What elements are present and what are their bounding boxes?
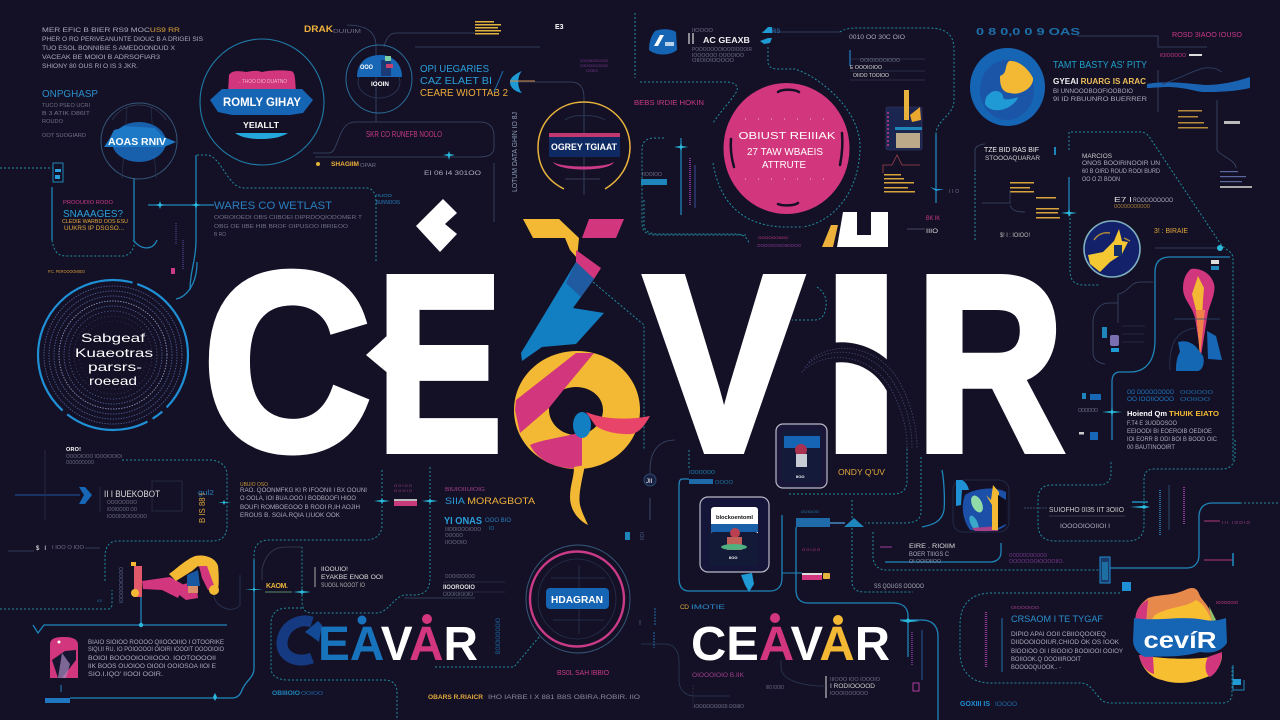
main title: CÉVIR: C [203,221,371,503]
circle badge: small blue book: IOOIN [371,81,389,88]
text block: SIA MORAGBOTA: OOO BIO [485,518,511,524]
mini bars: top orange text [475,21,501,34]
label: SHAGIIM: EI 06 I4 301OO [424,170,481,177]
side tag and SNAAAGES text block: UUKRS IP DSGSO... [64,226,124,232]
label: E3 and side notes [555,24,608,73]
text block: WARES CO WETLAST: BUNNOOIS [376,200,400,206]
footer label strip: BS0L SAH IBBIO [557,670,610,677]
circle badge: ROMLY GIHAY: YEIALLT [243,120,280,130]
text block: GARE RURAL [880,543,1064,565]
label: DRAK [304,24,361,35]
text block: left side label: OOT SUOGIARD [42,133,86,139]
triangle node and tag: OOIOOO [801,509,819,514]
label and lines near blob panel: IOOOOIOOIIOI I [1060,523,1110,530]
badge: cevíR [1133,588,1238,683]
circle badge: ROMLY GIHAY: .. THOO DIO DUATNO [238,79,288,85]
logo: blue shield with text [649,27,780,64]
text block: GARE RURAL: BOER TIIIGS C [909,551,949,558]
label: SI ONIO [757,216,1188,248]
logo: blue shield with text: POOOOOOOIOOOIOOOIR [692,47,752,53]
arrow and text block bottom-left: IOOIOOOO OO [107,507,137,513]
small orange text stack and graph [883,155,959,195]
arrow and text block bottom-left: II I BUEKOBOT [104,489,160,499]
label: SI ONIO: IIIO [926,229,938,235]
text block: CRSAOM: DIIDOOIOOIUR,CHIOD OK OS IOOK [1011,639,1120,646]
small orange text stack and graph: IIO [949,189,959,195]
text block: TAMT BASTY [1053,60,1147,103]
phone 2: IIOO [729,555,737,560]
badge: cevíR: cevíR [1144,627,1217,653]
mini pink bar node [394,483,417,506]
text block: CRSAOM: IOOOO [995,702,1017,708]
large dotted circle: parsrs- [88,360,142,374]
text block: GARE RURAL: OI OOIOIIOO [909,559,941,565]
text block: OPI UEGARIES: CAZ ELAET BI [420,76,492,87]
pink arch icon with paragraph: IIK BOOS OUOIOO OIOOI OOIOSOA IIOI E [88,663,217,670]
labels around right wordmark [640,498,922,710]
label: KAOM node: SUOGL NOOOT IO [321,583,365,589]
label: SI ONIO: 3! : BIRAIE [1154,228,1188,235]
text block: TAMT BASTY: TAMT BASTY AS' PITY [1053,60,1147,71]
wordmark: CEAVAR left: EAVAR [318,618,478,671]
circle badge: small blue book [346,45,412,113]
pink circle callout: ATTRUTE [762,159,806,171]
text block: WARES CO WETLAST: OBG OE IIBE HIB BROF OIPUSOO IBRIEOO [214,224,348,230]
footer label strip [272,670,640,701]
text block: left side label: ONPGHASP [42,89,98,100]
large dotted circle: Sabgeaf [81,331,146,345]
arrow and text block bottom-left: IOOOIOIOOOOOO [107,514,147,520]
label and lines near blob panel: SUIOFHO 0I35 IIT 3OIIO [1049,507,1125,514]
logo: blue shield with text: AC GEAXB [703,35,750,45]
side tag and SNAAAGES text block: SNAAAGES? [63,209,123,220]
small side texts top right [1178,110,1252,188]
text block: CRSAOM: BOIIOOK.Q OOOIIIROOIT [1011,656,1081,663]
vertical label near arrow: gul2 [198,490,214,497]
label: SHAGIIM: OPAR [360,163,376,169]
side tag and SNAAAGES text block: PROOUDIO RODO [63,200,113,206]
label: ONDY: ONDY Q'UV [838,468,886,477]
arrow and text block bottom-left: OOOOOOOO [107,500,137,506]
side bars in dashed panel [641,158,695,208]
label: KAOM node [262,547,383,592]
label small: IIOOROOIO [443,584,475,591]
text block: right Hoiend: OO IOOIIOOOO [1127,396,1174,403]
dotted swoosh across I [802,348,917,448]
phone 1: IIOO [796,474,804,479]
text block: OPI UEGARIES: OPI UEGARIES [420,64,489,75]
arrow and text block bottom-left: OOOOOOOOO [66,460,94,466]
pink circle callout: OBIUST REIIIAK [738,130,836,142]
label: small left tags: $I [36,546,46,552]
labels around right wordmark: IOOOIOOOOOO [830,691,868,697]
arrow and text block bottom-left: ORO! [66,447,81,453]
label: SI ONIO: OOOOOOOOIIOOOO [757,243,801,248]
text block: left side label: TUCO PSEO UCRI [42,103,90,109]
text block: WARES CO WETLAST [176,193,400,245]
text block: CRSAOM [960,605,1124,708]
table of labels: 0010 OO 30C OIO [849,34,905,41]
footer label strip: OBARS R.RIAICR [428,694,483,701]
text block: centre-bottom paragraph: BOUFI ROMBOEGOO B ROOI R,IH AOJIH [240,504,360,511]
heading: blue digits top right: 0 8 0,0 0 9 OAS [976,26,1080,38]
labels around right wordmark: IIOI [640,532,646,540]
triangle node and tag: OOIOO [802,547,820,552]
text block: CRSAOM: BOOOOQUOOK.. - [1011,664,1061,671]
text block: SIA MORAGBOTA: IIIOOIOOOIOOO [445,527,481,533]
colourful Z glyph [521,219,624,361]
text block: MARCIOS: OOOOOOOOOOO [1114,204,1150,210]
text block: CRSAOM: DIPIO APAI OOII CBIIOQOOIEQ [1011,631,1106,638]
text block: right Hoiend: Hoiend Qm [1127,411,1167,418]
footer label strip: IHO IARBE I X 881 B8S OBIRA.ROBIR. IIO [488,694,640,701]
text block: centre-bottom paragraph: UBUIO OSO [240,482,268,488]
pink arch icon with paragraph [45,637,225,703]
text block: SIA MORAGBOTA: IIOOOIO [445,540,467,546]
arrow and text block bottom-left [15,447,182,520]
label: KAOM node: KAOM. [266,583,288,590]
heading: blue digits top right: IOIOOOOO [1160,53,1186,59]
label: SI ONIO: $! I : IOIOO! [1000,233,1030,239]
side tag and SNAAAGES text block: P.C. PEROOOOMIEO [48,269,85,274]
label: E3 and side notes: OOOOIIIOOOOOOIO [580,58,608,63]
text block: GARE RURAL: EIRE . RIOIIM [909,543,955,550]
side bars in dashed panel: IIOOIOO [642,172,662,178]
large dotted circle: Kuaeotras [75,346,153,360]
text block: top-left intro: TUO ESOL BONNIBIE S AMEDOONDUD X [42,45,176,52]
text block: right Hoiend: 00 BAUTINOOIRT [1127,444,1175,451]
heading: blue digits top right: ROSD 3IAOO IOUSO [1172,32,1243,39]
label: E3 and side notes: OOIO [586,68,598,73]
accent over I [822,212,888,247]
footer label strip: OBIIIOIO [272,690,300,697]
main title: CÉVIR: I [821,225,902,504]
circle badge: OGREY TGIAAT: OGREY TGIAAT [551,142,617,153]
text block: OPI UEGARIES [420,64,508,99]
text block: TAMT BASTY: GYEAI RUARG IS ARAC [1053,77,1146,86]
text block: MARCIOS: E7 I [1114,197,1132,204]
text block: centre-bottom paragraph [240,482,367,519]
label: pink EBS IRDIE HOKIN: BEBS IRDIE HOKIN [634,98,704,107]
labels around right wordmark: IMOTIE [691,604,726,611]
logo: blue shield with text: OIIOIOIOOOOO [692,58,734,64]
logo: blue shield with text: RS [772,29,780,35]
label and lines near blob panel [1024,485,1250,566]
blue tag on connector [1100,557,1131,591]
text block: MARCIOS: ONOS BOOIRINOOIR UN [1082,160,1160,167]
text block: top-left intro: MER EFIC B BIER RS9 MOC US9 RR [42,27,180,34]
circle badge: AOAS RNIV [101,103,177,179]
text block: right Hoiend: OO OOOOOOOOO [1127,389,1174,396]
labels above phone 2: JII [646,479,653,485]
table of labels: E OOOIOIOO [850,65,883,71]
pink circle callout [724,83,850,214]
text block: MARCIOS: ROOOOOOOOO [1133,197,1173,204]
small robot icon [1102,326,1145,352]
triangle node and tag: SS QOUGS OOOOO [874,583,924,590]
text block: right Hoiend: OOOOOO [1180,390,1214,396]
small planet icon [1084,221,1140,277]
ring badge: HDAGRAN [496,532,630,654]
circle badge: OGREY TGIAAT [538,102,630,189]
text block: right Hoiend: EEIOODI BI EOEROIB OEDIOE [1127,428,1213,435]
label and lines near blob panel: III IOOIO [1222,520,1250,525]
labels around right wordmark: IIIO IOOIO [766,685,784,691]
E notch arrow [366,333,390,375]
table of labels: OIIOO TOOIOO [853,73,890,79]
logo: blue shield with text: IIOOOO [692,28,713,34]
labels around right wordmark: OIOOOIOIO B.IIK [692,672,745,679]
pink arch icon with paragraph: SIQI,II RU, IO POIOOOOI OIOIRI IOOOIT OOOOIOIO [88,646,224,653]
labels around right wordmark: IIIOOO IOO IOOOIO [830,677,880,683]
text block: GARE RURAL: OOOOOOOOOOO [1009,553,1047,559]
phone 2: blockoentoml [716,515,754,521]
arrow and text block bottom-left: OOOOIOOO IOOOIOOIOI [66,454,122,460]
text block: MARCIOS [1082,153,1173,210]
label: SHAGIIM: SHAGIIM [331,161,359,168]
label: DRAK: DUIUIM [333,29,361,35]
text block: centre-bottom paragraph: EROUS B. SGIA.RQIA I,IUOK OOK [240,512,341,519]
label: E3 and side notes: E3 [555,24,564,31]
text block: left side label [42,89,98,139]
circle badge: small blue book: OOO [360,65,373,71]
vertical label near arrow [198,490,214,523]
vertical label near arrow: B IS 88 I [198,493,207,523]
accent over E [416,199,457,252]
colourful Q ring [514,351,650,525]
main title: CÉVIR: R [916,225,1064,504]
text block: SIA MORAGBOTA: SIIA MORAGBOTA [445,496,535,506]
main title: CÉVIR: V [645,224,803,503]
text block: CRSAOM: OIOOOIOO [1011,605,1040,610]
blue globe icon [970,48,1045,126]
text block: OPI UEGARIES: CEARE WIOTTAB 2 [420,88,508,99]
labels above phone 2 [644,470,733,486]
text block: TAMT BASTY: BI UNNOOOBOOFIOOBOIO [1053,88,1133,95]
large dotted circle [38,280,188,430]
text block: MARCIOS: 60 B OIRD ROUD ROOI BURD [1082,168,1160,175]
text block: top-left intro: VACEAK BE MOIOI B ADRSOFIAR3 [42,54,160,61]
text block: CRSAOM: BIOOIOO OI I BIOOIO BOOIOOI OOIOY [1011,648,1124,655]
text block: centre-bottom paragraph: RAO. QOONMFKG KI R IFOONII I BX OOUNI [240,487,367,494]
text block: WARES CO WETLAST: IIUOO [376,193,393,198]
label small: OOOIOIOOIO [443,592,473,598]
large dotted circle: roeead [89,374,137,388]
text block: centre-bottom paragraph: O OOLA, IOI BUA.OOO I BODBOOFI HIOO [240,495,356,502]
labels around right wordmark: I RODIOOOOD [830,684,876,690]
text block: top-left intro: SHIONY 80 OUS RI O IS 3 JKR. [42,63,138,70]
small square icon bottom right [1233,665,1244,690]
vertical text: LOTUM DATA GHIN IO 8J [512,112,519,192]
circle badge: AOAS RNIV: AOAS RNIV [108,137,166,148]
ring badge: HDAGRAN: HDAGRAN [551,594,603,606]
text block: SIA MORAGBOTA: OOOOO [445,533,463,539]
main title: CÉVIR [203,221,1064,504]
side tag and SNAAAGES text block [48,163,183,274]
wave ribbon [1147,68,1250,92]
flame icon [1170,260,1222,371]
footer label strip: OOIOO [301,691,323,697]
label: pink SKR CO: SKR CO RUNEFB NOOLO [366,130,442,139]
label: E3 and side notes: OOIOOOIOOOIOOIO [580,63,608,68]
text block: WARES CO WETLAST: B RO [214,232,226,238]
label: small left tags: I IOO O IOO [52,545,84,551]
pink arch icon with paragraph: SIO.I.IQO' IIOOI OOIR. [88,671,163,678]
label: SI ONIO: BK IK [926,216,940,222]
circle badge: ROMLY GIHAY: ROMLY GIHAY [223,95,301,109]
text block: right Hoiend: F.T4 E 3UODOSOO [1127,420,1177,427]
text block: WARES CO WETLAST: WARES CO WETLAST [214,200,332,212]
text block: TAMT BASTY: 9I ID RBUUNRO BUERRER [1053,96,1147,103]
circle badge: ROMLY GIHAY [200,39,324,165]
mini pink bar node: OOOIO [394,488,412,493]
figure: stretching shape [97,555,240,609]
label small [443,574,505,598]
text block: MARCIOS: MARCIOS [1082,153,1113,160]
text block: MARCIOS: OO O ZI BOON [1082,176,1120,183]
text block: SIA MORAGBOTA: IO [489,526,494,532]
pink arch icon with paragraph: BIAIO SIOIOO ROOOO QIIOOOIIIO I OTOORIKE [88,639,225,646]
text block: CRSAOM: GOXIII IS [960,701,990,708]
ring badge: HDAGRAN: BOIOIOOOOIO [496,618,502,654]
phone 2 [700,497,769,592]
text block: SIA MORAGBOTA [444,487,535,546]
mini pink bar node: OOIOO [394,483,412,488]
mini poster card [886,90,922,150]
badge: cevíR: IOOOOOIO [1216,600,1238,605]
text block: TZE BIO: TZE BID RAS BIF [984,147,1039,154]
text block: CRSAOM: CRSAOM I TE TYGAF [1011,614,1103,625]
triangle node and tag [782,509,924,590]
labels above phone 2: OOOO [715,480,733,486]
labels around right wordmark: IOOOOOOOIOI OOIIIO [694,704,744,710]
text block: WARES CO WETLAST: OOROIOEDI OBS CIIBOEI DIPRDOQIODOMER T [214,215,362,221]
label: small left tags [8,545,100,552]
label: SHAGIIM [316,161,481,177]
pink arch icon with paragraph: BOIOI BOOOOIOOIIOOO. IOOTOOOOII [88,655,216,662]
text block: right Hoiend: THUIK EIATO [1169,411,1220,418]
main title: CÉVIR: E [377,224,502,503]
text block: left side label: ROUDO [42,119,63,125]
logo: blue shield with text: IOOOOOO OOOOIOO [692,53,744,59]
text block: TZE BIO [982,147,1060,218]
figure: stretching shape: IOOOOOIOOOO [119,567,125,603]
pink circle callout: 27 TAW WBAEIS [747,146,823,158]
side tag and SNAAAGES text block: CLEDIE WARBD OOS ESU [62,219,128,225]
table of labels: OOIOIOOOIOOO [860,58,900,64]
text block: right Hoiend [1078,389,1220,451]
text block: right Hoiend: OOOOOO [1078,408,1098,414]
label: KAOM node: IIOOUIO! [321,567,348,573]
heading: blue digits top right [976,26,1243,59]
text block: top-left intro [42,27,204,70]
label small: OOOIIOOOOO [445,574,475,580]
labels around right wordmark: CD [680,604,689,611]
labels above phone 2: IOOOOOO [689,470,715,476]
figure: stretching shape: IOI [97,598,102,603]
text block: TZE BIO: STOOOAQUARAR [985,155,1040,162]
phone 1 [776,424,827,488]
text block: right Hoiend: IOI EORR B ODI BOI B BOOD OIC [1127,436,1217,443]
text block: SIA MORAGBOTA: YI ONAS [444,516,482,527]
text block: top-left intro: PHER O RO PERIVEANUNTE DIOUC B A DRIGEI SIS [42,36,204,43]
text block: GARE RURAL: OOOOOOOIOOOOIIO. [1009,559,1064,565]
label: DRAK: DRAK [304,24,333,35]
label: SI ONIO: OOOOOOIOIO [758,235,788,240]
label: KAOM node: EYAKBE ENOB OOI [321,574,383,581]
text block: SIA MORAGBOTA: BIUIOIIUIOIG [445,487,485,493]
text block: right Hoiend: OOIIOO [1180,397,1211,403]
sparkle nodes on connector lines [139,143,1223,701]
mid-right colour blob icon [953,480,1009,532]
wordmark: CEAVAR right: CEAVAR [691,618,890,671]
icon: cyan arrow head [510,71,535,93]
table of labels [849,34,925,80]
text block: left side label: B 3 ATIK D86IT [42,111,90,117]
